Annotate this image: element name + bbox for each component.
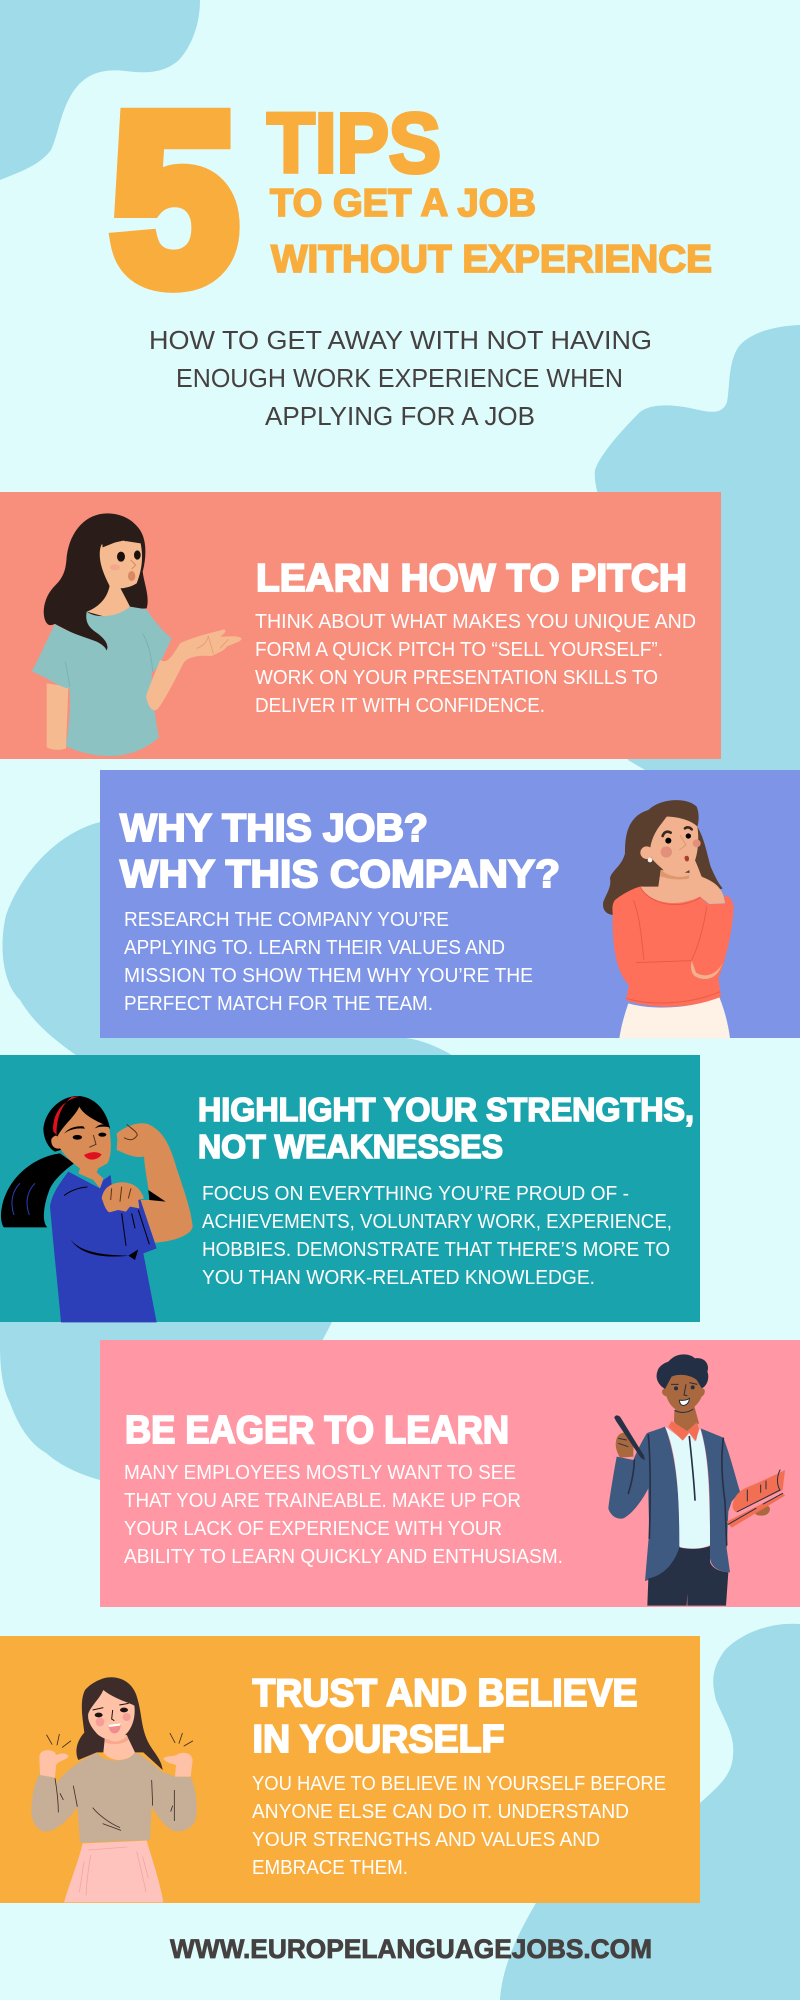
- body text: pitch: WORK ON YOUR PRESENTATION SKILLS TO: [255, 667, 658, 689]
- heading: be eager to learn: BE EAGER TO LEARN: [125, 1409, 509, 1452]
- panel: be eager to learn: [100, 1340, 800, 1607]
- body text: pitch: THINK ABOUT WHAT MAKES YOU UNIQUE AND: [255, 611, 696, 633]
- heading: highlight your strengths: NOT WEAKNESSES: [198, 1128, 503, 1165]
- body text: pitch: FORM A QUICK PITCH TO “SELL YOURSELF”.: [255, 639, 663, 661]
- body text: research: [124, 909, 533, 1015]
- title: big number 5: 5: [111, 65, 238, 334]
- heading: trust and believe: [252, 1672, 638, 1761]
- heading: trust and believe: IN YOURSELF: [252, 1718, 504, 1761]
- body text: believe: EMBRACE THEM.: [252, 1857, 408, 1879]
- subtitle: [149, 327, 652, 431]
- illustration: woman with thumbs pointing at herself: [31, 1677, 197, 1902]
- subtitle: APPLYING FOR A JOB: [265, 403, 535, 431]
- background blob: right: [595, 325, 800, 780]
- body text: employees: THAT YOU ARE TRAINEABLE. MAKE UP FOR: [124, 1490, 521, 1512]
- heading: learn how to pitch: LEARN HOW TO PITCH: [256, 557, 687, 600]
- body text: believe: YOUR STRENGTHS AND VALUES AND: [252, 1829, 600, 1851]
- body text: pitch: DELIVER IT WITH CONFIDENCE.: [255, 695, 545, 717]
- body text: focus: YOU THAN WORK-RELATED KNOWLEDGE.: [202, 1267, 595, 1289]
- body text: focus: [202, 1183, 672, 1289]
- illustration: woman flexing arm: [1, 1096, 193, 1322]
- body text: focus: FOCUS ON EVERYTHING YOU’RE PROUD OF -: [202, 1183, 629, 1205]
- body text: employees: ABILITY TO LEARN QUICKLY AND ENTHUSIASM.: [124, 1546, 563, 1568]
- body text: employees: MANY EMPLOYEES MOSTLY WANT TO SEE: [124, 1462, 516, 1484]
- title: without experience: WITHOUT EXPERIENCE: [271, 238, 712, 281]
- heading: why this job why this company: [120, 807, 560, 896]
- heading: highlight your strengths: [198, 1091, 694, 1165]
- heading: trust and believe: TRUST AND BELIEVE: [252, 1672, 638, 1715]
- body text: pitch: [255, 611, 696, 717]
- website url: WWW.EUROPELANGUAGEJOBS.COM: [170, 1934, 652, 1964]
- body text: believe: [252, 1773, 666, 1879]
- panel: why this job: [100, 770, 800, 1038]
- background blob: top left: [0, 0, 200, 180]
- background blob: left middle: [0, 822, 452, 1480]
- illustration: man with pen and book: [608, 1354, 785, 1606]
- background blob: bottom right: [500, 1624, 800, 2000]
- panel: highlight your strengths: [0, 1055, 700, 1322]
- illustration: woman with open hand: [32, 513, 242, 756]
- body text: research: APPLYING TO. LEARN THEIR VALUES AND: [124, 937, 505, 959]
- body text: research: PERFECT MATCH FOR THE TEAM.: [124, 993, 433, 1015]
- title: TIPS: TIPS: [267, 96, 441, 190]
- heading: why this job why this company: WHY THIS JOB?: [120, 807, 428, 850]
- body text: employees: [124, 1462, 563, 1568]
- subtitle: ENOUGH WORK EXPERIENCE WHEN: [176, 365, 623, 393]
- panel: learn how to pitch: [0, 492, 721, 759]
- subtitle: HOW TO GET AWAY WITH NOT HAVING: [149, 327, 652, 355]
- body text: focus: HOBBIES. DEMONSTRATE THAT THERE’S MORE TO: [202, 1239, 670, 1261]
- body text: believe: YOU HAVE TO BELIEVE IN YOURSELF BEFORE: [252, 1773, 666, 1795]
- heading: why this job why this company: WHY THIS COMPANY?: [120, 853, 560, 896]
- body text: research: MISSION TO SHOW THEM WHY YOU’RE THE: [124, 965, 533, 987]
- illustration: thinking woman: [603, 800, 734, 1038]
- heading: highlight your strengths: HIGHLIGHT YOUR STRENGTHS,: [198, 1091, 694, 1128]
- body text: employees: YOUR LACK OF EXPERIENCE WITH YOUR: [124, 1518, 502, 1540]
- title: to get a job: TO GET A JOB: [270, 182, 536, 225]
- body text: believe: ANYONE ELSE CAN DO IT. UNDERSTAND: [252, 1801, 629, 1823]
- body text: research: RESEARCH THE COMPANY YOU’RE: [124, 909, 449, 931]
- panel: trust and believe in yourself: [0, 1636, 700, 1903]
- body text: focus: ACHIEVEMENTS, VOLUNTARY WORK, EXPERIENCE,: [202, 1211, 672, 1233]
